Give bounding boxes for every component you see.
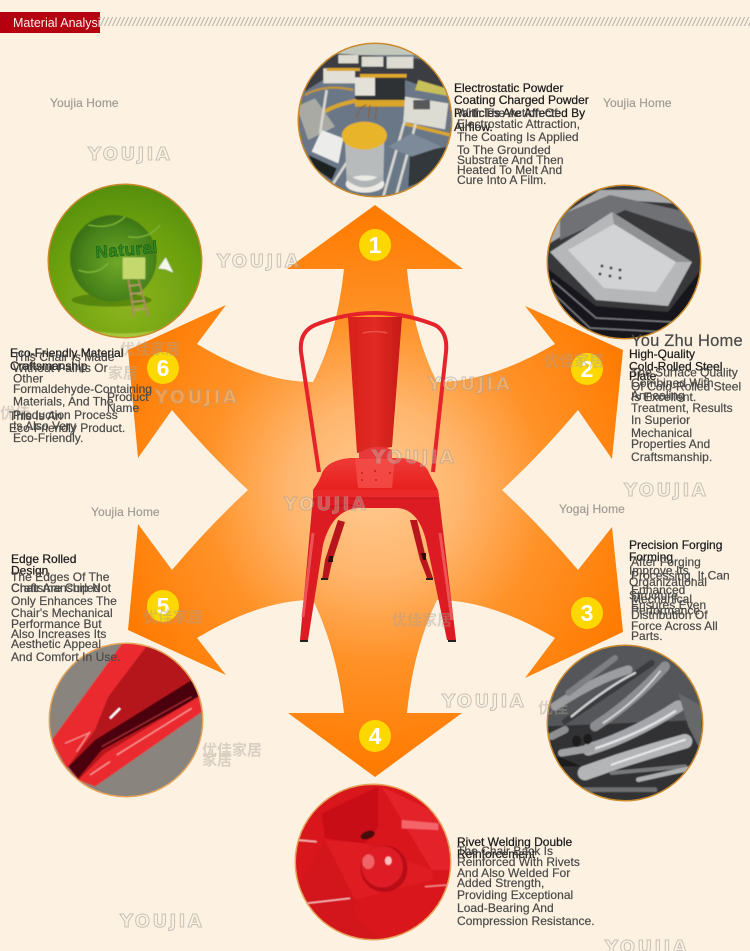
body 5: And Comfort In Use.: [11, 650, 120, 664]
heading 1: Coating Charged Powder: [454, 93, 589, 107]
heading 2: High-Quality: [629, 347, 695, 361]
body 3: Performance: [631, 604, 700, 618]
photo 4: red rivet close-up: [293, 784, 452, 942]
text block 2: cold-rolled steel: [629, 332, 743, 464]
body 3: After Forging: [631, 555, 701, 569]
body 3: Mechanical: [631, 592, 692, 606]
body 1: Heated To Melt And: [457, 163, 562, 177]
body 1: Electrostatic Attraction,: [457, 117, 580, 131]
watermarks: outlined logo: YOUJIA: [441, 691, 526, 712]
body 5: Performance But: [11, 617, 102, 631]
body 1: Cure Into A Film.: [457, 173, 546, 187]
heading 4: Rivet Welding Double: [457, 835, 572, 849]
body 5: Only Enhances The: [11, 594, 117, 608]
watermarks: Chinese logo: 家居: [108, 364, 138, 382]
body 2: Craftsmanship.: [631, 450, 712, 464]
body 1: To The Grounded: [457, 143, 551, 157]
body 2: Is Excellent.: [631, 390, 696, 404]
body 5: Chair's Mechanical: [11, 606, 113, 620]
photo 1: powder coating machines: [295, 40, 455, 200]
watermarks: brand text: Yogaj Home: [559, 502, 625, 516]
body 1: Substrate And Then: [457, 153, 564, 167]
body 5: Also Increases Its: [11, 627, 106, 641]
heading 1: Particles Are Affected By: [454, 106, 585, 120]
text block 6: eco-friendly: [9, 346, 152, 445]
watermarks: outlined logo: YOUJIA: [371, 447, 456, 468]
heading 3: Precision Forging: [629, 538, 722, 552]
body 2: [631, 366, 741, 464]
text block 1: electrostatic powder coating: [454, 81, 589, 187]
number badges: [147, 229, 603, 752]
body 4: Providing Exceptional: [457, 888, 573, 902]
heading 6: Eco-Friendly Material: [10, 346, 123, 360]
watermarks: outlined logo: YOUJIA: [87, 144, 172, 165]
body 5: [11, 570, 120, 664]
body 3: Organizational: [629, 575, 707, 589]
body 3: Structure: [629, 588, 678, 602]
body 2: Properties And: [631, 437, 710, 451]
body 3: Parts.: [631, 629, 663, 643]
body 2: Mechanical: [631, 426, 692, 440]
body 3: Ensures Even: [631, 598, 706, 612]
product name label: Product: [107, 390, 149, 404]
heading 6: [10, 346, 123, 373]
number badges: 2: [581, 356, 593, 382]
number badges: 6: [157, 355, 169, 381]
body 2: The Surface Quality: [631, 366, 738, 380]
body 6: Without Paints Or: [13, 361, 108, 375]
watermarks: Chinese logo: 优佳家居: [392, 611, 452, 629]
body 4: Compression Resistance.: [457, 914, 595, 928]
heading 4: [457, 835, 572, 861]
photo 5: red rolled edge close-up: [48, 642, 205, 798]
photo 6: green eco sphere: [45, 180, 205, 340]
heading 1: [454, 81, 589, 134]
body 3: Distribution Of: [631, 608, 708, 622]
body 6: This Chair Is Made: [13, 350, 115, 364]
body 2: Treatment, Results: [631, 401, 733, 415]
heading 1: Electrostatic Powder: [454, 81, 563, 95]
photo 2: cold-rolled steel plates: [546, 184, 702, 340]
product name label: [9, 390, 149, 435]
body 6: Materials, And The: [13, 394, 114, 408]
body 6: Formaldehyde-Containing: [13, 382, 152, 396]
heading 5: Design: [11, 564, 48, 578]
body 4: Added Strength,: [457, 876, 544, 890]
heading 6: Craftsmanship: [10, 359, 88, 373]
heading 4: Reinforcement: [457, 847, 536, 861]
body 1: The Coating Is Applied: [457, 130, 579, 144]
body 1: [457, 106, 580, 187]
watermarks: outlined logo: YOUJIA: [119, 911, 204, 932]
body 4: And Also Welded For: [457, 866, 570, 880]
watermarks: Chinese logo: 优佳: [0, 405, 30, 422]
heading 2: Cold-Rolled Steel: [629, 360, 722, 374]
heading 1: Airflow.: [454, 120, 493, 134]
watermarks: outlined logo: YOUJIA: [154, 387, 239, 408]
heading 2: Plate: [629, 369, 657, 383]
body 6: Production Process: [13, 408, 118, 422]
body 4: Load-Bearing And: [457, 901, 554, 915]
text block 4: rivet welding: [457, 835, 595, 928]
body 3: Improve Its: [629, 564, 689, 578]
heading 3: Forming: [629, 550, 673, 564]
brand name: You Zhu Home: [631, 332, 743, 350]
heading 2: [629, 347, 722, 383]
number badges: 4: [369, 723, 382, 749]
body 3: Enhanced: [631, 583, 685, 597]
number badges: 1: [369, 232, 382, 258]
body 4: The Chair Back Is: [457, 844, 553, 858]
product name label: Eco-Friendly Product.: [9, 421, 125, 435]
body 2: In Superior: [631, 413, 690, 427]
watermarks: Chinese logo: 优佳家居: [202, 741, 262, 759]
body 6: [13, 350, 152, 445]
text block 3: precision forging: [629, 538, 730, 643]
watermarks: Chinese logo: 优佳家居: [120, 340, 180, 358]
watermarks: outlined logo: YOUJIA: [623, 480, 708, 501]
watermarks: outlined logo: YOUJIA: [216, 251, 301, 272]
number badges: 3: [581, 600, 593, 626]
body 2: Annealing: [631, 388, 685, 402]
body 5: Aesthetic Appeal: [11, 637, 101, 651]
watermarks: Chinese logo: 家居: [202, 751, 232, 769]
text block 5: edge rolled: [11, 552, 120, 664]
body 2: Combined With: [631, 376, 714, 390]
product name label: Name: [107, 401, 139, 415]
watermarks: outlined logo: YOUJIA: [427, 374, 512, 395]
watermarks: brand text: Youjia Home: [91, 505, 160, 519]
body 5: Craftsmanship Not: [11, 581, 112, 595]
six-arrow orange burst: [128, 205, 623, 777]
body 6: Other: [13, 372, 43, 386]
chair: [300, 313, 456, 642]
body 5: Chair Are Curled: [11, 581, 100, 595]
header bar: Material Analysis: [13, 16, 107, 30]
watermarks: outlined logo: [87, 144, 708, 951]
body 2: Of Cold-Rolled Steel: [631, 380, 741, 394]
heading 5: [11, 552, 76, 578]
watermarks: outlined logo: YOUJIA: [283, 494, 368, 515]
product name label: This Is An: [9, 409, 62, 423]
watermarks: brand text: Youjia Home: [603, 96, 672, 110]
body 6: Eco-Friendly.: [13, 431, 83, 445]
body 4: [457, 844, 595, 928]
body 5: The Edges Of The: [11, 570, 110, 584]
watermarks: Chinese logo: 优佳: [538, 700, 568, 717]
body 1: With The Action Of: [457, 106, 558, 120]
body 6: Is Also Very: [13, 419, 76, 433]
body 4: Reinforced With Rivets: [457, 855, 580, 869]
watermarks: brand text: [50, 96, 672, 519]
body 3: Processing, It Can: [631, 568, 730, 582]
watermarks: brand text: Youjia Home: [50, 96, 119, 110]
number badges: 5: [157, 593, 170, 619]
header bar: [0, 12, 750, 33]
photo 6: green eco sphere: Natural: [95, 238, 158, 262]
heading 5: Edge Rolled: [11, 552, 76, 566]
watermarks: Chinese logo: 优佳家居: [143, 608, 203, 626]
body 3: Force Across All: [631, 619, 718, 633]
watermarks: Chinese logo: 优佳家居: [544, 352, 604, 370]
body 3: [629, 555, 730, 643]
watermarks: Chinese logo: [0, 340, 604, 769]
photo 3: forged steel tubes: [545, 643, 705, 803]
heading 3: [629, 538, 722, 564]
